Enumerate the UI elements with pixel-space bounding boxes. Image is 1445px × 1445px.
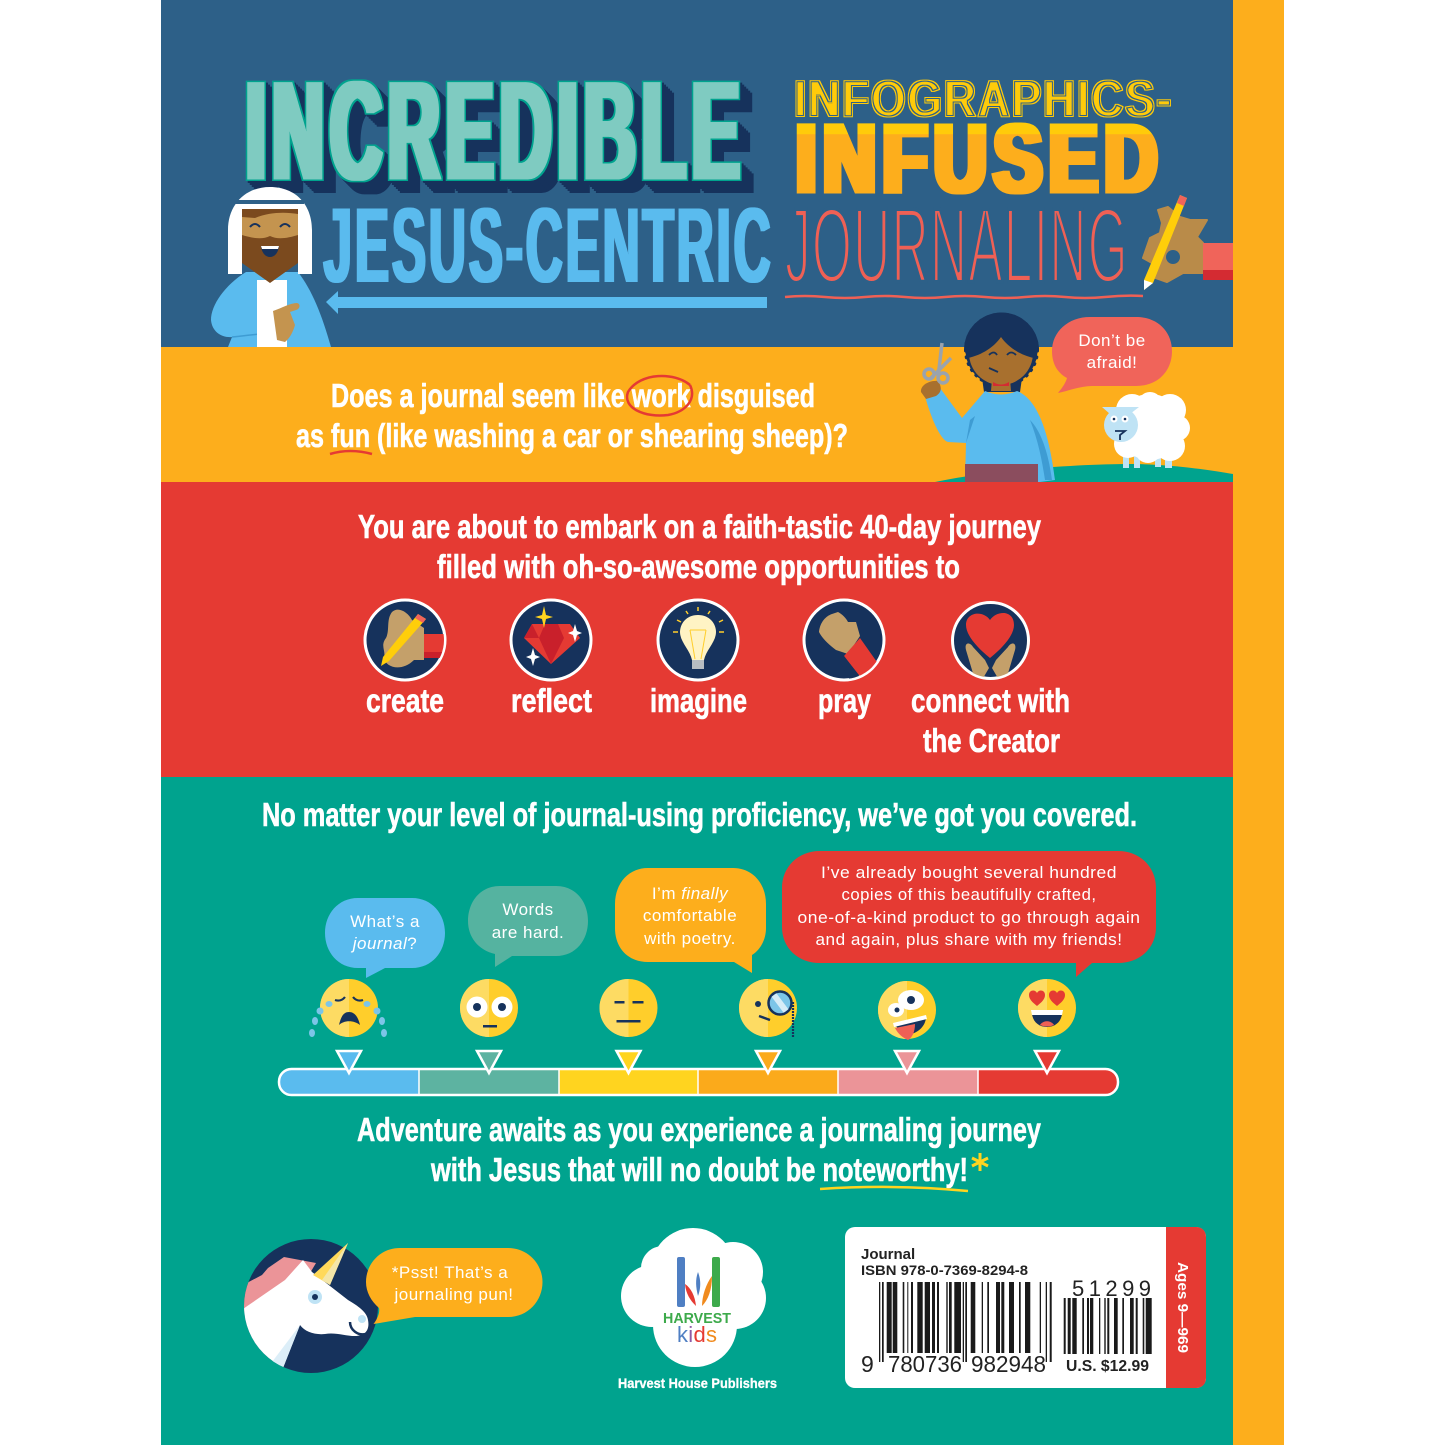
heading: Infused: INFUSED <box>796 104 1164 213</box>
label: connect with the Creator <box>911 682 1070 759</box>
speech bubble: journaling pun <box>366 1248 542 1324</box>
speech bubble: Don't be afraid: afraid! <box>1087 353 1137 372</box>
intro text: filled with oh-so-awesome opportunities to <box>437 548 960 585</box>
icon: imagine light bulb <box>658 600 738 680</box>
add-on bars <box>1064 1298 1152 1354</box>
barcode numbers: 51299 <box>1072 1276 1151 1301</box>
panel: question band <box>161 313 1233 482</box>
logo: Harvest Kids cloud: HARVEST <box>663 1311 731 1327</box>
label: connect with the Creator: connect with <box>911 682 1070 719</box>
speech bubble: words are hard <box>468 886 588 967</box>
speech bubble: journaling pun: *Psst! That’s a <box>392 1263 508 1282</box>
panel: opportunities <box>161 482 1233 777</box>
barcode bars <box>879 1282 1052 1362</box>
closing text: with Jesus that will no doubt be noteworthy! <box>430 1151 968 1188</box>
heading: Infographics-: INFOGRAPHICS- <box>794 70 1173 128</box>
barcode numbers: 780736 <box>888 1351 962 1377</box>
wavy underline <box>785 296 1143 298</box>
icon: Jesus character <box>211 187 331 347</box>
icon: hand holding pencil <box>1143 195 1233 290</box>
speech bubble: several hundred copies: one-of-a-kind product to go through again <box>798 908 1140 927</box>
icon: shepherd girl <box>921 313 1055 482</box>
emoji: crying <box>309 979 387 1037</box>
publisher name: Harvest House Publishers <box>618 1376 777 1391</box>
panel: proficiency scale <box>161 777 1233 1445</box>
intro text <box>358 508 1042 585</box>
speech bubble: several hundred copies: and again, plus share with my friends! <box>816 930 1122 949</box>
panel: title banner <box>161 0 1233 347</box>
speech bubble: words are hard: are hard. <box>492 923 564 942</box>
label: create: create <box>366 682 444 719</box>
label: reflect: reflect <box>511 682 592 719</box>
speech bubble: finally comfortable with poetry: with poetry. <box>643 929 736 948</box>
text: Journal and ISBN: ISBN 978-0-7369-8294-8 <box>861 1262 1028 1278</box>
icon: create <box>365 600 446 680</box>
closing text <box>357 1111 1041 1188</box>
yellow underline <box>820 1187 968 1191</box>
speech bubble: Don't be afraid <box>1052 317 1172 393</box>
price: U.S. $12.99 <box>1066 1358 1149 1375</box>
circle around work <box>627 376 692 416</box>
question text <box>296 377 848 454</box>
panel: title banner: JESUS-CENTRIC <box>324 185 774 305</box>
text: Journal and ISBN: Journal <box>861 1246 915 1263</box>
yellow asterisk <box>972 1153 988 1171</box>
text: Ages: Ages 9—969 <box>1174 1262 1191 1353</box>
logo: Harvest Kids cloud: kids <box>677 1322 717 1347</box>
speech bubble: several hundred copies: I’ve already bought several hundred <box>821 863 1117 882</box>
barcode numbers: 982948 <box>971 1351 1046 1377</box>
hill <box>935 464 1233 482</box>
speech bubble: several hundred copies: copies of this beautifully crafted, <box>842 885 1096 904</box>
label: imagine: imagine <box>650 682 747 719</box>
icon: unicorn <box>240 1239 378 1380</box>
speech bubble: journaling pun: journaling pun! <box>393 1285 514 1304</box>
closing text: Adventure awaits as you experience a journaling journey <box>357 1111 1041 1148</box>
emoji: silly tongue <box>878 981 936 1040</box>
question text: as fun (like washing a car or shearing sheep)? <box>296 417 848 454</box>
logo: Harvest Kids cloud <box>621 1228 766 1367</box>
barcode numbers: 9 <box>861 1351 874 1377</box>
icon: connect heart in hands <box>952 602 1028 680</box>
arrow pointing to Jesus <box>326 291 767 314</box>
speech bubble: what's a journal <box>325 898 445 978</box>
heading: proficiency: No matter your level of journal-using proficiency, we’ve got you covered. <box>262 796 1137 833</box>
speech bubble: Don't be afraid: Don’t be <box>1078 331 1146 350</box>
emoji: heart eyes <box>1018 979 1076 1037</box>
text: Journal and ISBN <box>861 1246 1028 1278</box>
scissors <box>924 343 951 383</box>
proficiency bar <box>279 1069 1118 1095</box>
barcode numbers <box>861 1276 1151 1377</box>
heading: Incredible: INCREDIBLE <box>246 52 746 209</box>
question text: Does a journal seem like work disguised <box>331 377 815 414</box>
speech bubble: finally comfortable with poetry <box>615 868 766 973</box>
emoji: neutral <box>600 979 658 1037</box>
underline under fun <box>330 451 372 454</box>
intro text: You are about to embark on a faith-tastic 40-day journey <box>358 508 1042 545</box>
label: connect with the Creator: the Creator <box>923 722 1060 759</box>
speech bubble: what's a journal: What’s a <box>350 912 420 931</box>
speech bubble: finally comfortable with poetry: comfortable <box>643 906 737 925</box>
emoji: wide eyed <box>460 979 518 1037</box>
yellow spine strip <box>1233 0 1284 1445</box>
speech bubble: words are hard: Words <box>502 900 554 919</box>
icon: sheep <box>1102 392 1190 468</box>
level markers <box>337 1051 1059 1073</box>
barcode panel <box>845 1227 1206 1388</box>
emoji: monocle <box>739 979 797 1037</box>
speech bubble: several hundred copies <box>782 851 1156 977</box>
icon: reflect gem <box>511 600 591 680</box>
icon: pray hands <box>804 600 884 684</box>
label: pray: pray <box>818 682 871 719</box>
speech bubble: finally comfortable with poetry: I’m finally <box>652 884 729 903</box>
speech bubble: what's a journal: journal? <box>351 934 417 953</box>
